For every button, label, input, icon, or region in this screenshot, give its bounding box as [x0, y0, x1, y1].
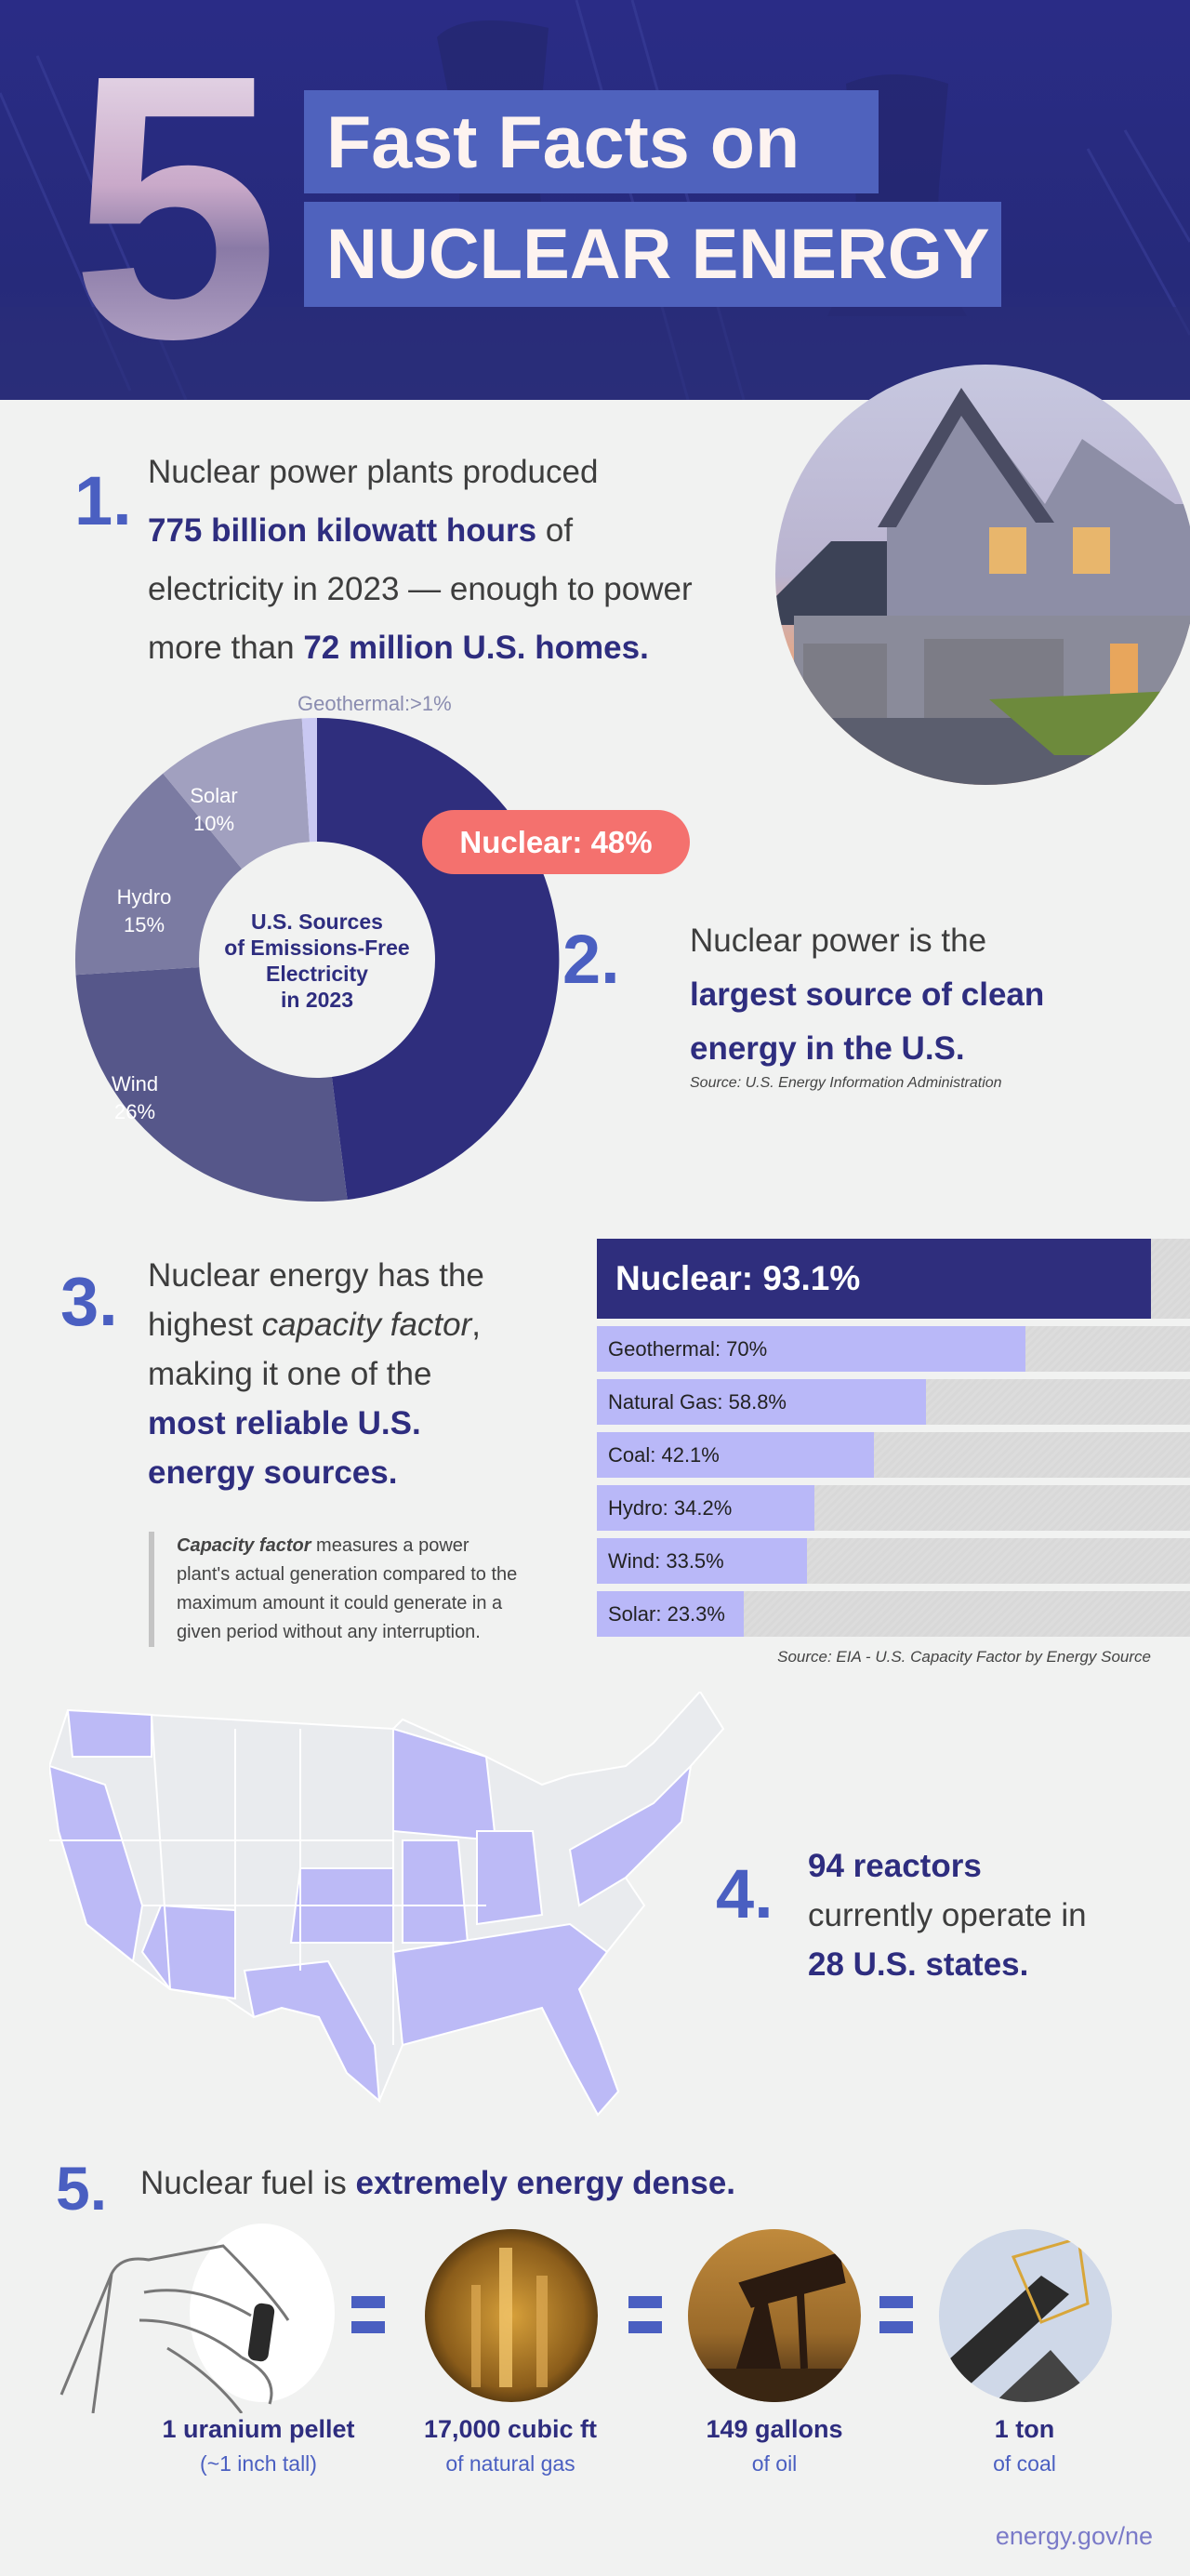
- bar coal: Coal: 42.1%: [608, 1443, 720, 1467]
- label: natural gas: [424, 2415, 597, 2476]
- label: coal: of coal: [993, 2451, 1056, 2476]
- photo: oil pump: [688, 2229, 861, 2402]
- title line 2: NUCLEAR ENERGY: [326, 215, 990, 294]
- fact 4: [716, 1848, 1087, 1983]
- bar nuclear: Nuclear: 93.1%: [615, 1259, 860, 1297]
- donut chart: Hydro: [117, 885, 171, 909]
- bar source: Source: EIA - U.S. Capacity Factor by Energy Source: [777, 1648, 1151, 1666]
- title line 1: Fast Facts on: [326, 100, 800, 183]
- fact 2 text: largest source of clean: [690, 976, 1044, 1013]
- bar geothermal: Geothermal: 70%: [608, 1337, 767, 1361]
- fact 3 text: making it one of the: [148, 1356, 431, 1392]
- fact 3 text: [148, 1257, 484, 1491]
- label: uranium pellet: [162, 2415, 355, 2476]
- fact 1 text: 775 billion kilowatt hours of: [148, 512, 573, 549]
- equals sign 3: [879, 2296, 913, 2333]
- donut chart: Wind: [112, 1072, 158, 1095]
- fact 4 text: currently operate in: [808, 1897, 1087, 1933]
- number 3: 3.: [60, 1263, 118, 1340]
- number 5: 5.: [56, 2154, 107, 2223]
- bar solar: [597, 1591, 1190, 1637]
- photo: house circle: [775, 365, 1190, 785]
- fact 2 text: energy in the U.S.: [690, 1030, 965, 1067]
- fact 1 text: Nuclear power plants produced: [148, 454, 598, 490]
- bar solar: Solar: 23.3%: [608, 1602, 725, 1626]
- fact 3 text: highest capacity factor,: [148, 1307, 481, 1343]
- number 4: 4.: [716, 1855, 774, 1932]
- header banner: [0, 0, 1190, 400]
- donut chart: of Emissions-Free: [224, 936, 410, 960]
- label: uranium pellet: 1 uranium pellet: [162, 2415, 355, 2443]
- fact 5 heading: [56, 2154, 735, 2223]
- fact 4 text: [808, 1848, 1087, 1983]
- bar wind: Wind: 33.5%: [608, 1549, 724, 1573]
- donut chart: in 2023: [281, 988, 353, 1012]
- donut chart: 15%: [124, 913, 165, 936]
- wind 26%: [76, 967, 348, 1202]
- nuclear label pill: Nuclear: 48%: [459, 825, 653, 859]
- fact 4 text: 94 reactors: [808, 1848, 982, 1884]
- donut chart: Electricity: [266, 962, 368, 986]
- capacity factor note: Capacity factor measures a power plant's actual generation compared to the maximum amount it could generate in a given period without any interruption.: [177, 1535, 517, 1642]
- donut chart: U.S. Sources: [251, 910, 383, 934]
- label: coal: 1 ton: [995, 2415, 1054, 2443]
- bar hydro: Hydro: 34.2%: [608, 1496, 732, 1520]
- title line 1: [304, 90, 879, 193]
- hydro 15%: [75, 774, 242, 975]
- fact 2 text: Nuclear power is the: [690, 923, 986, 959]
- fact 5 text: Nuclear fuel is extremely energy dense.: [140, 2165, 735, 2201]
- photo: coal conveyor: [939, 2229, 1112, 2402]
- US map: [49, 1692, 724, 2117]
- bar geothermal: [597, 1326, 1190, 1372]
- bar hydro: [597, 1485, 1190, 1531]
- bar nuclear: [597, 1239, 1190, 1319]
- photo: natural gas plant: [425, 2229, 598, 2402]
- title: [304, 90, 1001, 307]
- fact 1 text: electricity in 2023 — enough to power: [148, 571, 693, 607]
- source: Source: U.S. Energy Information Administration: [690, 1075, 1002, 1091]
- label: oil: 149 gallons: [706, 2415, 843, 2443]
- icon: hand holding uranium pellet: [60, 2224, 335, 2413]
- fact 1 text: [148, 454, 693, 666]
- solar 10%: [163, 718, 310, 869]
- bar natural gas: [597, 1379, 1190, 1425]
- fact 3: [60, 1257, 517, 1647]
- bar chart: capacity factor: [597, 1239, 1190, 1666]
- donut chart: 10%: [193, 812, 234, 835]
- fact 2: [562, 921, 1044, 1091]
- bar wind: [597, 1538, 1190, 1584]
- fact 1: [74, 454, 693, 666]
- fact 3 text: Nuclear energy has the: [148, 1257, 484, 1294]
- donut chart: Solar: [190, 784, 238, 807]
- geothermal: [302, 718, 317, 842]
- equals sign 2: [628, 2296, 662, 2333]
- label: natural gas: 17,000 cubic ft: [424, 2415, 597, 2443]
- nuclear 48%: [317, 718, 559, 1200]
- fact 1 text: more than 72 million U.S. homes.: [148, 630, 649, 666]
- number 2: 2.: [562, 921, 620, 998]
- bar coal: [597, 1432, 1190, 1478]
- label: oil: of oil: [752, 2451, 797, 2476]
- fact 3 text: most reliable U.S.: [148, 1405, 421, 1441]
- donut chart: 26%: [114, 1100, 155, 1123]
- label: oil: [706, 2415, 843, 2476]
- label: natural gas: of natural gas: [445, 2451, 575, 2476]
- bar natural gas: Natural Gas: 58.8%: [608, 1390, 787, 1414]
- equals sign 1: [351, 2296, 385, 2333]
- footer url: energy.gov/ne: [996, 2522, 1153, 2550]
- label: uranium pellet: (~1 inch tall): [200, 2451, 317, 2476]
- donut chart: [75, 692, 690, 1202]
- number 1: 1.: [74, 462, 132, 539]
- fact 4 text: 28 U.S. states.: [808, 1946, 1028, 1983]
- donut chart: Geothermal:>1%: [298, 692, 452, 715]
- label: coal: [993, 2415, 1056, 2476]
- nuclear label pill: [422, 810, 690, 874]
- fact 2 text: [690, 923, 1044, 1067]
- fact 3 text: energy sources.: [148, 1454, 397, 1491]
